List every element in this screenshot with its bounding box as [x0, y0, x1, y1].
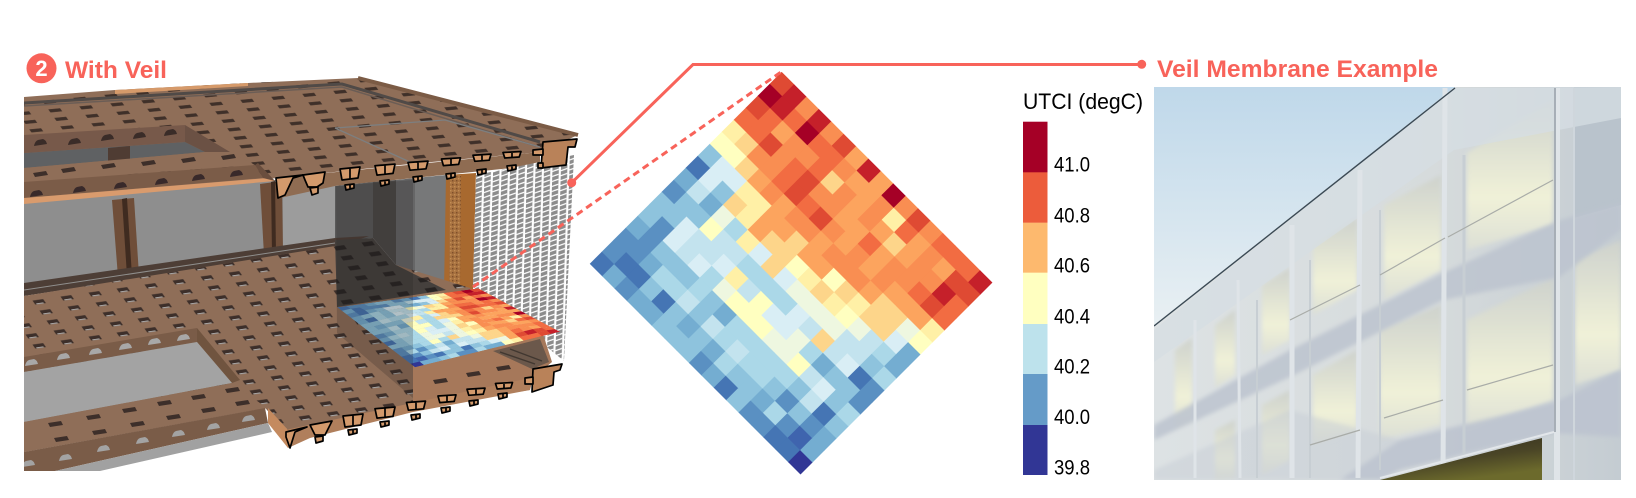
- back wall: [24, 180, 283, 283]
- heat map diamond: [589, 72, 993, 475]
- legend labels: 40.0: [1054, 405, 1090, 429]
- icon: number 2 badge: [26, 53, 56, 83]
- legend labels: 39.8: [1054, 456, 1090, 480]
- vertical fins: [1195, 88, 1574, 480]
- canopy edge: [1380, 432, 1554, 478]
- legend labels: 40.4: [1054, 304, 1090, 328]
- columns: [112, 181, 283, 277]
- upper slab top surface: [24, 78, 578, 203]
- panel: axonometric building section with veil: [22, 78, 578, 471]
- lower back ledge: [24, 236, 369, 296]
- dashed leader line: [473, 72, 781, 287]
- rails: [1290, 180, 1553, 445]
- heat map projected on floor: [338, 288, 560, 368]
- roof line: [1154, 88, 1455, 326]
- icon: number 2 badge: 2: [35, 56, 48, 81]
- colour legend: UTCI: [1023, 89, 1143, 480]
- upper slab opening and inner beam: [24, 125, 255, 182]
- legend labels: 40.6: [1054, 254, 1090, 278]
- lower section profile outlines: [286, 364, 562, 448]
- dark room floor: [335, 238, 446, 307]
- room interior glass view: [335, 175, 446, 290]
- legend labels: [1054, 153, 1090, 479]
- facade floor bands: [1154, 203, 1621, 480]
- legend labels: 40.2: [1054, 354, 1090, 378]
- photo: veil membrane facade: [1154, 87, 1621, 480]
- wood column: [444, 173, 476, 290]
- upper slab beam face: [24, 163, 275, 204]
- back wall right light section: [283, 184, 335, 250]
- roof band: [1314, 87, 1621, 249]
- solid leader line to membrane example: [567, 60, 1146, 187]
- upper section profile outlines: [276, 139, 577, 198]
- heading: With Veil: [26, 53, 167, 84]
- veil membrane mesh: [473, 155, 574, 361]
- legend labels: 41.0: [1054, 153, 1090, 177]
- window panes: [1174, 132, 1621, 465]
- legend title: UTCI (degC): [1023, 89, 1143, 114]
- heading text: With Veil: [65, 57, 167, 84]
- right bay: [1574, 87, 1621, 218]
- sky: [1154, 87, 1455, 325]
- lower slab front band: [268, 334, 552, 448]
- lower front beam: [22, 383, 272, 471]
- entrance opening: [1380, 438, 1542, 480]
- lower floor opening: [24, 328, 240, 422]
- glass overlay panel: [336, 180, 413, 398]
- colour bar: [1023, 122, 1048, 475]
- heading: Veil Membrane Example: Veil Membrane Example: [1157, 56, 1438, 83]
- upper slab section band: [276, 152, 540, 198]
- lower floor surface: [24, 246, 490, 452]
- legend labels: 40.8: [1054, 204, 1090, 228]
